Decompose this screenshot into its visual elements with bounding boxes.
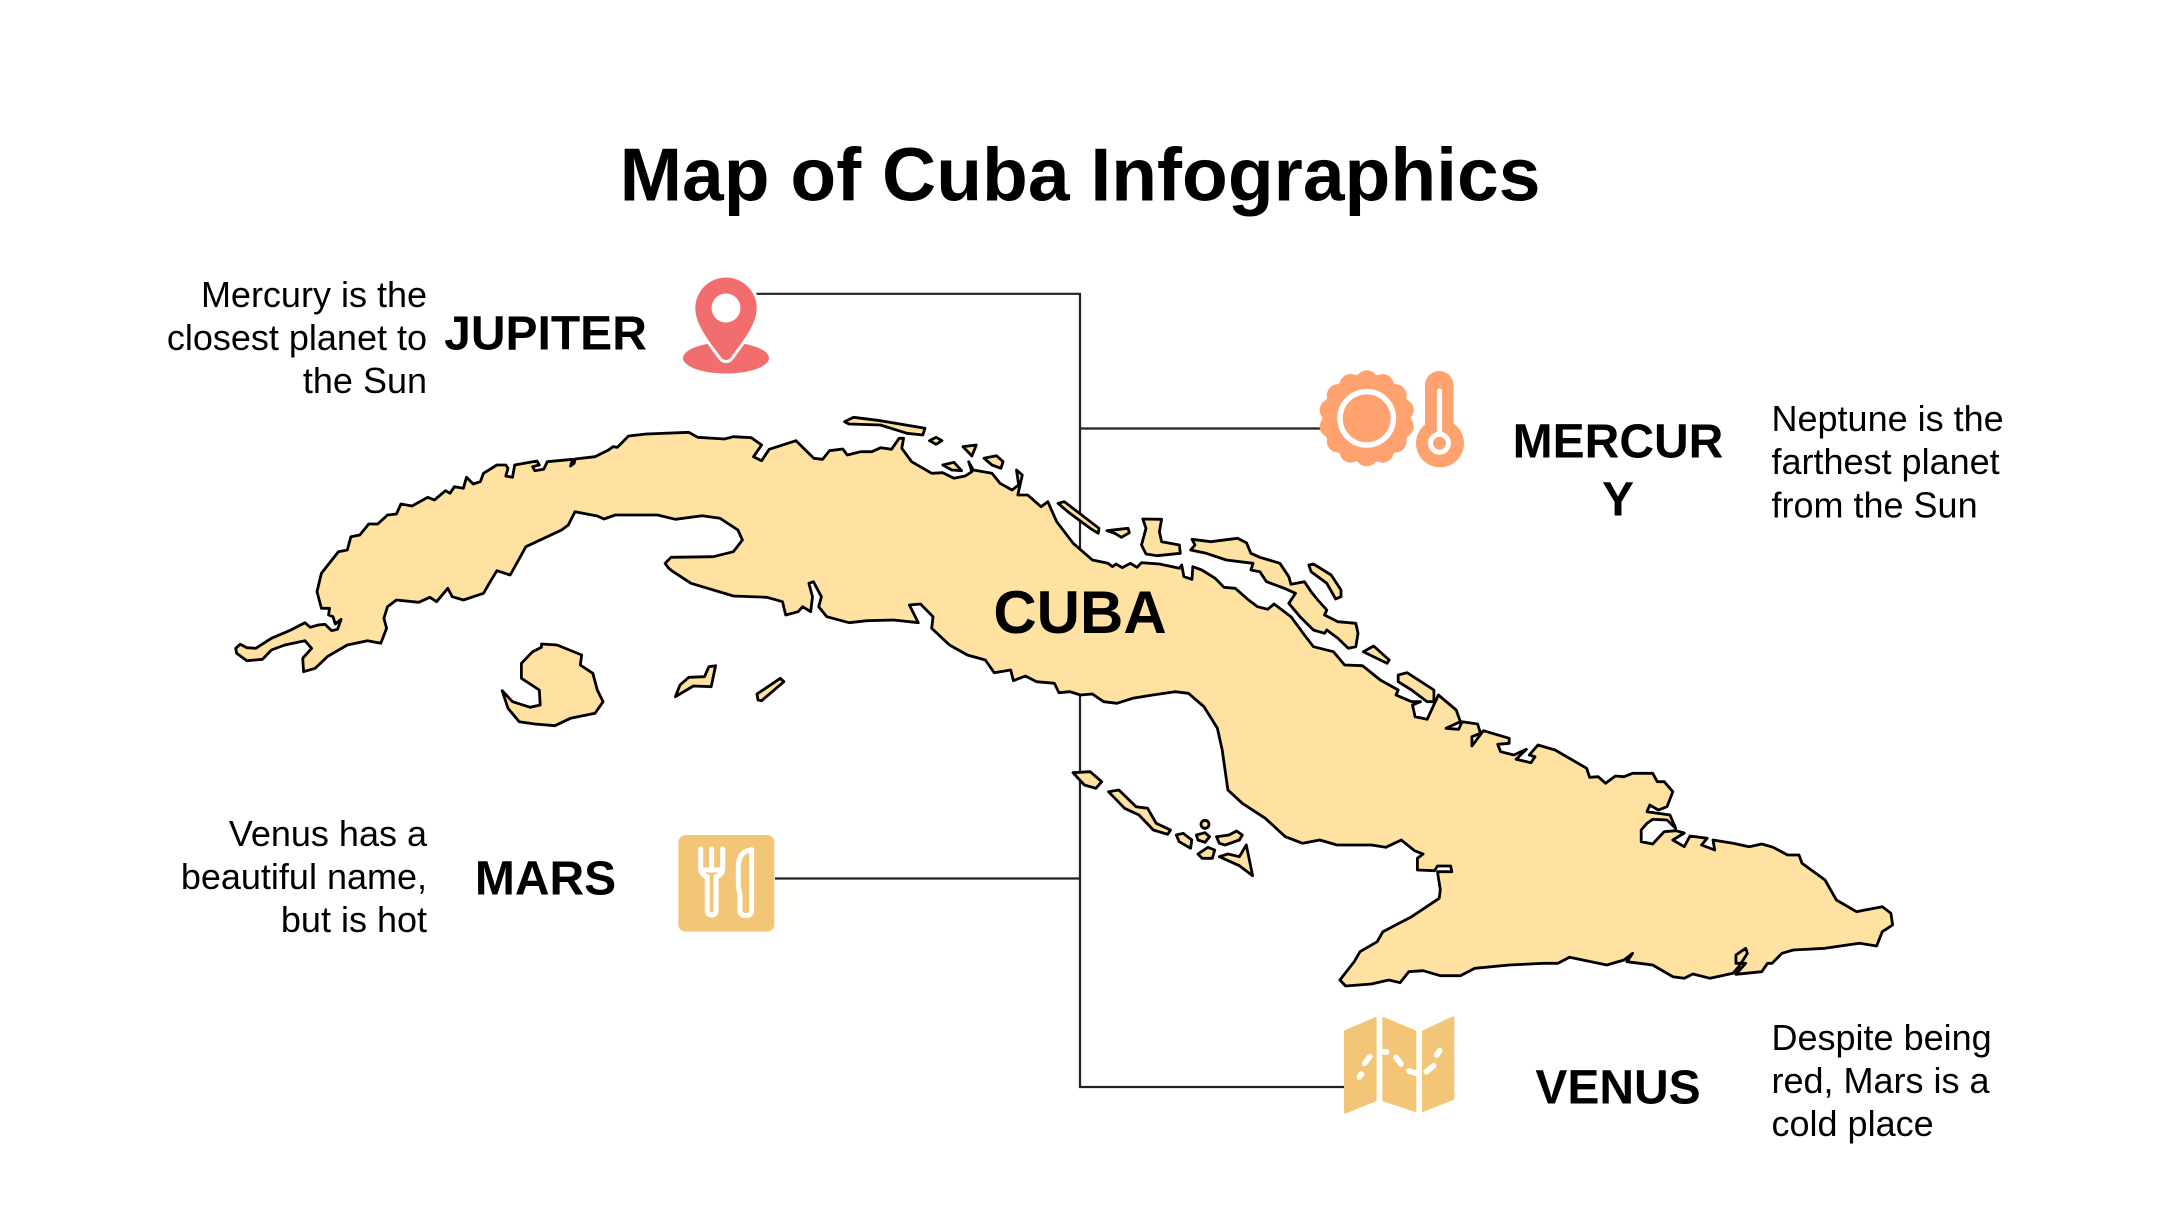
connector lines bbox=[755, 294, 1346, 1087]
icon: fork and knife bbox=[678, 835, 774, 932]
text: Mars description: but is hot bbox=[281, 899, 427, 940]
title: Map of Cuba Infographics bbox=[620, 132, 1540, 216]
panel: Mars bbox=[181, 813, 774, 940]
icon: sun badge and thermometer bbox=[1317, 370, 1464, 467]
southern and northern cays bbox=[675, 417, 1434, 876]
panel: Jupiter bbox=[167, 274, 769, 401]
text: Mars description: Venus has a bbox=[229, 813, 428, 854]
text: Mercury description: Neptune is the bbox=[1772, 398, 2004, 439]
mainland bbox=[236, 432, 1893, 986]
heading: Jupiter: JUPITER bbox=[444, 308, 647, 360]
icon: map pin bbox=[683, 278, 769, 374]
heading: Venus: VENUS bbox=[1535, 1062, 1701, 1114]
text: Mercury description: farthest planet bbox=[1772, 441, 2000, 482]
map of Cuba bbox=[236, 417, 1893, 986]
heading: Mercury: Y bbox=[1602, 474, 1634, 526]
text: Mars description: beautiful name, bbox=[181, 856, 427, 897]
text: Jupiter description: Mercury is the bbox=[201, 274, 427, 315]
heading: Mars: MARS bbox=[475, 852, 616, 906]
map label: CUBA: CUBA bbox=[993, 579, 1167, 646]
island: Isla de la Juventud bbox=[502, 644, 603, 726]
text: Jupiter description: closest planet to bbox=[167, 317, 427, 358]
text: Jupiter description: the Sun bbox=[303, 360, 427, 401]
text: Venus description: red, Mars is a bbox=[1772, 1060, 1991, 1101]
panel: Venus bbox=[1345, 1017, 1992, 1144]
panel: Mercury bbox=[1317, 370, 2004, 526]
text: Mercury description: from the Sun bbox=[1772, 484, 1978, 526]
heading: Mercury: MERCUR bbox=[1513, 416, 1723, 468]
text: Venus description: Despite being bbox=[1772, 1017, 1992, 1058]
text: Venus description: cold place bbox=[1772, 1103, 1934, 1144]
icon: folded map bbox=[1345, 1017, 1453, 1113]
